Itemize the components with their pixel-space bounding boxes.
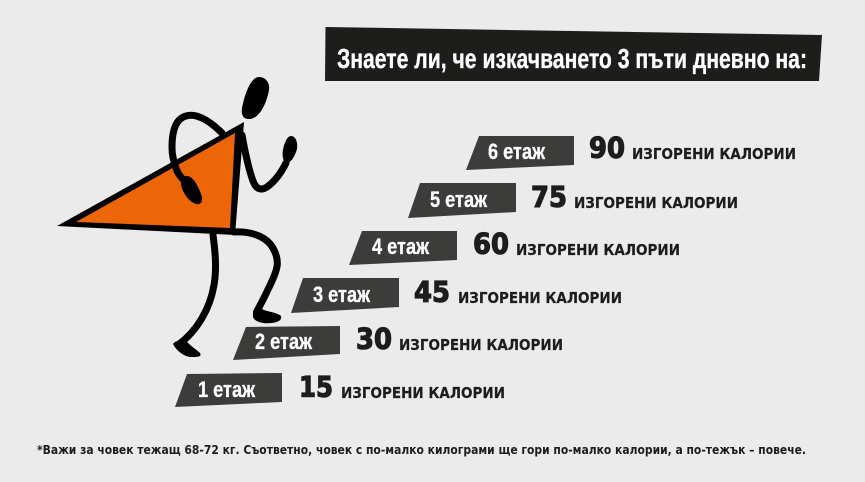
icon: foot back <box>173 340 201 357</box>
icon: foot front <box>253 309 281 323</box>
row: 3 floor: 3 етаж <box>313 282 370 307</box>
row: 1 floor: ИЗГОРЕНИ КАЛОРИИ <box>341 384 505 402</box>
row: 3 floor: ИЗГОРЕНИ КАЛОРИИ <box>458 289 622 307</box>
row: 4 floor <box>349 228 680 265</box>
row: 2 floor <box>233 323 563 360</box>
icon: hand left <box>181 176 202 204</box>
icon: head <box>242 77 269 119</box>
arm over triangle <box>175 165 187 183</box>
row: 6 floor <box>466 132 796 170</box>
icon: hand right <box>283 136 297 163</box>
row: 1 floor <box>175 371 505 407</box>
row: 6 floor: 90 <box>589 132 625 165</box>
title banner <box>325 27 822 81</box>
row: 5 floor: 75 <box>531 181 567 214</box>
row: 5 floor <box>408 181 738 218</box>
row: 4 floor: ИЗГОРЕНИ КАЛОРИИ <box>516 241 680 259</box>
row: 1 floor: 15 <box>299 371 333 404</box>
row: 1 floor: 1 етаж <box>198 377 255 402</box>
row: 4 floor: 4 етаж <box>372 234 429 259</box>
row: 2 floor: ИЗГОРЕНИ КАЛОРИИ <box>399 336 563 354</box>
row: 3 floor <box>291 276 622 313</box>
row: 6 floor: 6 етаж <box>488 139 545 164</box>
row: 2 floor: 30 <box>356 323 392 356</box>
row: 4 floor: 60 <box>473 228 509 261</box>
row: 3 floor: 45 <box>414 276 450 309</box>
triangle <box>57 122 244 235</box>
row: 2 floor: 2 етаж <box>255 329 312 354</box>
row: 6 floor: ИЗГОРЕНИ КАЛОРИИ <box>632 145 796 163</box>
row: 5 floor: ИЗГОРЕНИ КАЛОРИИ <box>574 194 738 212</box>
figure: stick man carrying orange triangle <box>57 77 297 357</box>
row: 5 floor: 5 етаж <box>430 187 487 212</box>
